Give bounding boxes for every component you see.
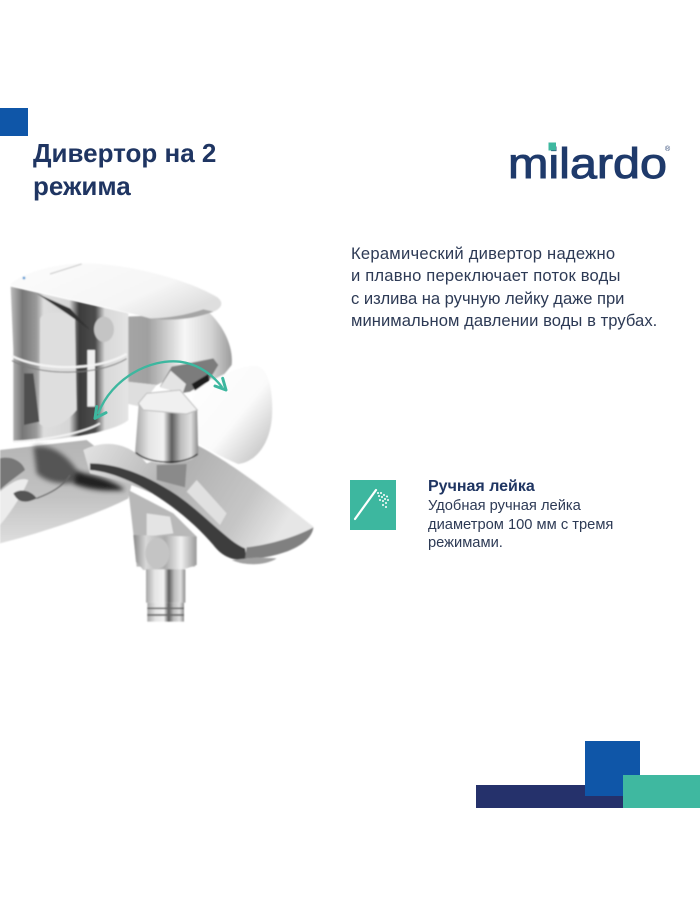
description text: с излива на ручную лейку даже при bbox=[351, 289, 624, 308]
mixer body bbox=[11, 287, 128, 442]
logo: milardo: ® bbox=[665, 145, 671, 153]
description text: и плавно переключает поток воды bbox=[351, 266, 621, 285]
wall plate back bbox=[127, 313, 232, 385]
description text bbox=[351, 244, 657, 330]
diverter knob bbox=[135, 390, 198, 487]
title bbox=[33, 138, 216, 201]
description text: минимальном давлении воды в трубах. bbox=[351, 311, 657, 330]
icon: hand shower bbox=[350, 480, 396, 530]
title: Дивертор на 2 bbox=[33, 138, 216, 168]
bottom connector bbox=[128, 490, 197, 622]
lower arm and left wall plate bbox=[0, 440, 133, 543]
corner accent square bbox=[0, 108, 28, 136]
feature text: hand shower: Удобная ручная лейка bbox=[428, 498, 581, 514]
lever logo dot bbox=[23, 277, 25, 279]
feature text: hand shower: Ручная лейка bbox=[428, 478, 535, 495]
feature text: hand shower: диаметром 100 мм с тремя bbox=[428, 516, 613, 532]
lever handle bbox=[10, 263, 221, 320]
wall plate white shell bbox=[192, 366, 272, 464]
faucet illustration bbox=[0, 263, 314, 623]
teal two-way arrow bbox=[95, 361, 226, 418]
spout bbox=[83, 444, 313, 557]
decorative blocks bottom right bbox=[476, 741, 700, 808]
diverter lever bbox=[160, 358, 218, 393]
description text: Керамический дивертор надежно bbox=[351, 244, 615, 263]
feature text: hand shower: режимами. bbox=[428, 535, 503, 551]
logo: milardo: milardo bbox=[508, 140, 667, 188]
title: режима bbox=[33, 171, 131, 201]
feature text: hand shower bbox=[428, 478, 613, 551]
